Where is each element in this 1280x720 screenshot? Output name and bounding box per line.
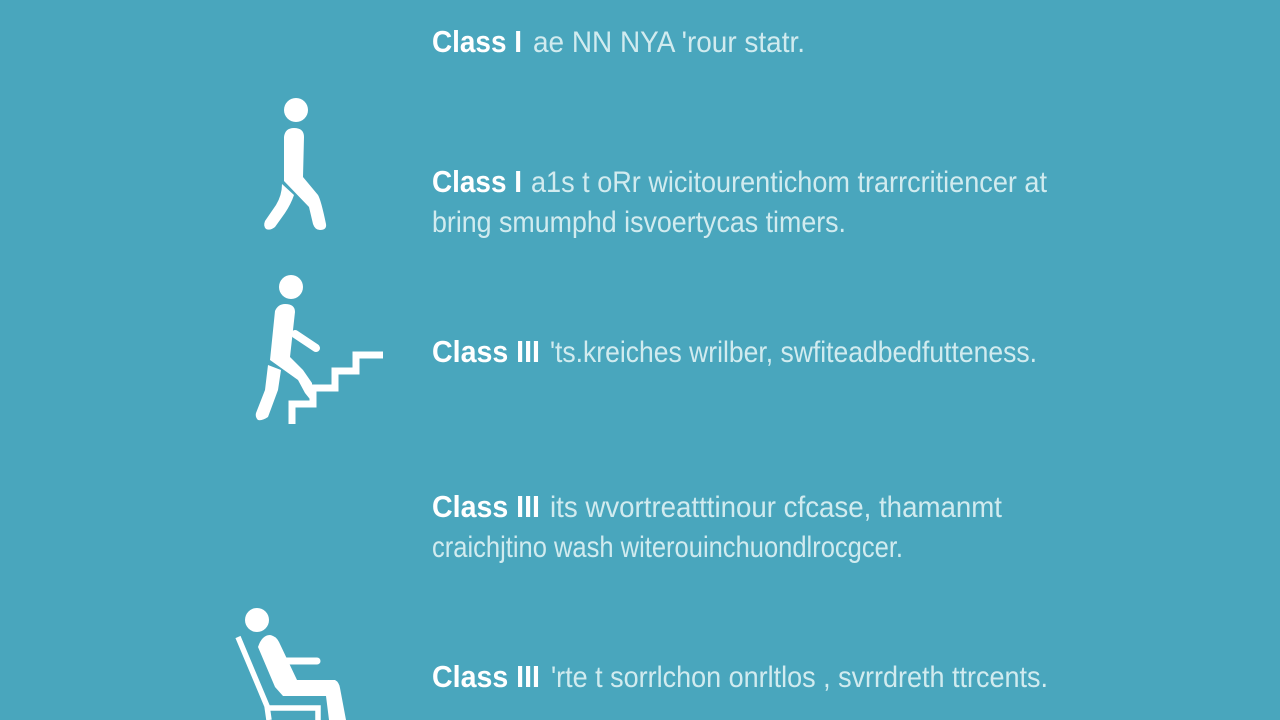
row 5: Class III text: 'rte t sorrlchon onrltlos , svrrdreth ttrcents. xyxy=(551,661,1048,694)
row 2: Class I text: a1s t oRr wicitourentichom trarrcritiencer at xyxy=(531,166,1048,199)
row 3: Class III text: 'ts.kreiches wrilber, swfiteadbedfutteness. xyxy=(550,336,1037,369)
row 1: Class I text: Class I xyxy=(432,24,522,59)
row 2: Class I text: Class I xyxy=(432,164,522,199)
icon: person seated in chair xyxy=(238,608,346,720)
row 1: Class I text xyxy=(432,24,805,59)
row 4: Class III text: Class III xyxy=(432,489,540,524)
row 2: Class I text: bring smumphd isvoertycas timers. xyxy=(432,206,846,239)
row 4: Class III text: craichjtino wash witerouinchuondlrocgcer. xyxy=(432,531,903,564)
row 4: Class III text xyxy=(432,489,1003,564)
row 5: Class III text: Class III xyxy=(432,659,540,694)
row 1: Class I text: ae NN NYA 'rour statr. xyxy=(533,26,805,59)
row 4: Class III text: its wvortreatttinour cfcase, thamanmt xyxy=(550,491,1003,524)
row 3: Class III text: Class III xyxy=(432,334,540,369)
row 3: Class III text xyxy=(432,334,1037,369)
icon: walking person xyxy=(264,98,326,230)
row 2: Class I text xyxy=(432,164,1048,239)
icon: person climbing stairs xyxy=(256,275,383,424)
